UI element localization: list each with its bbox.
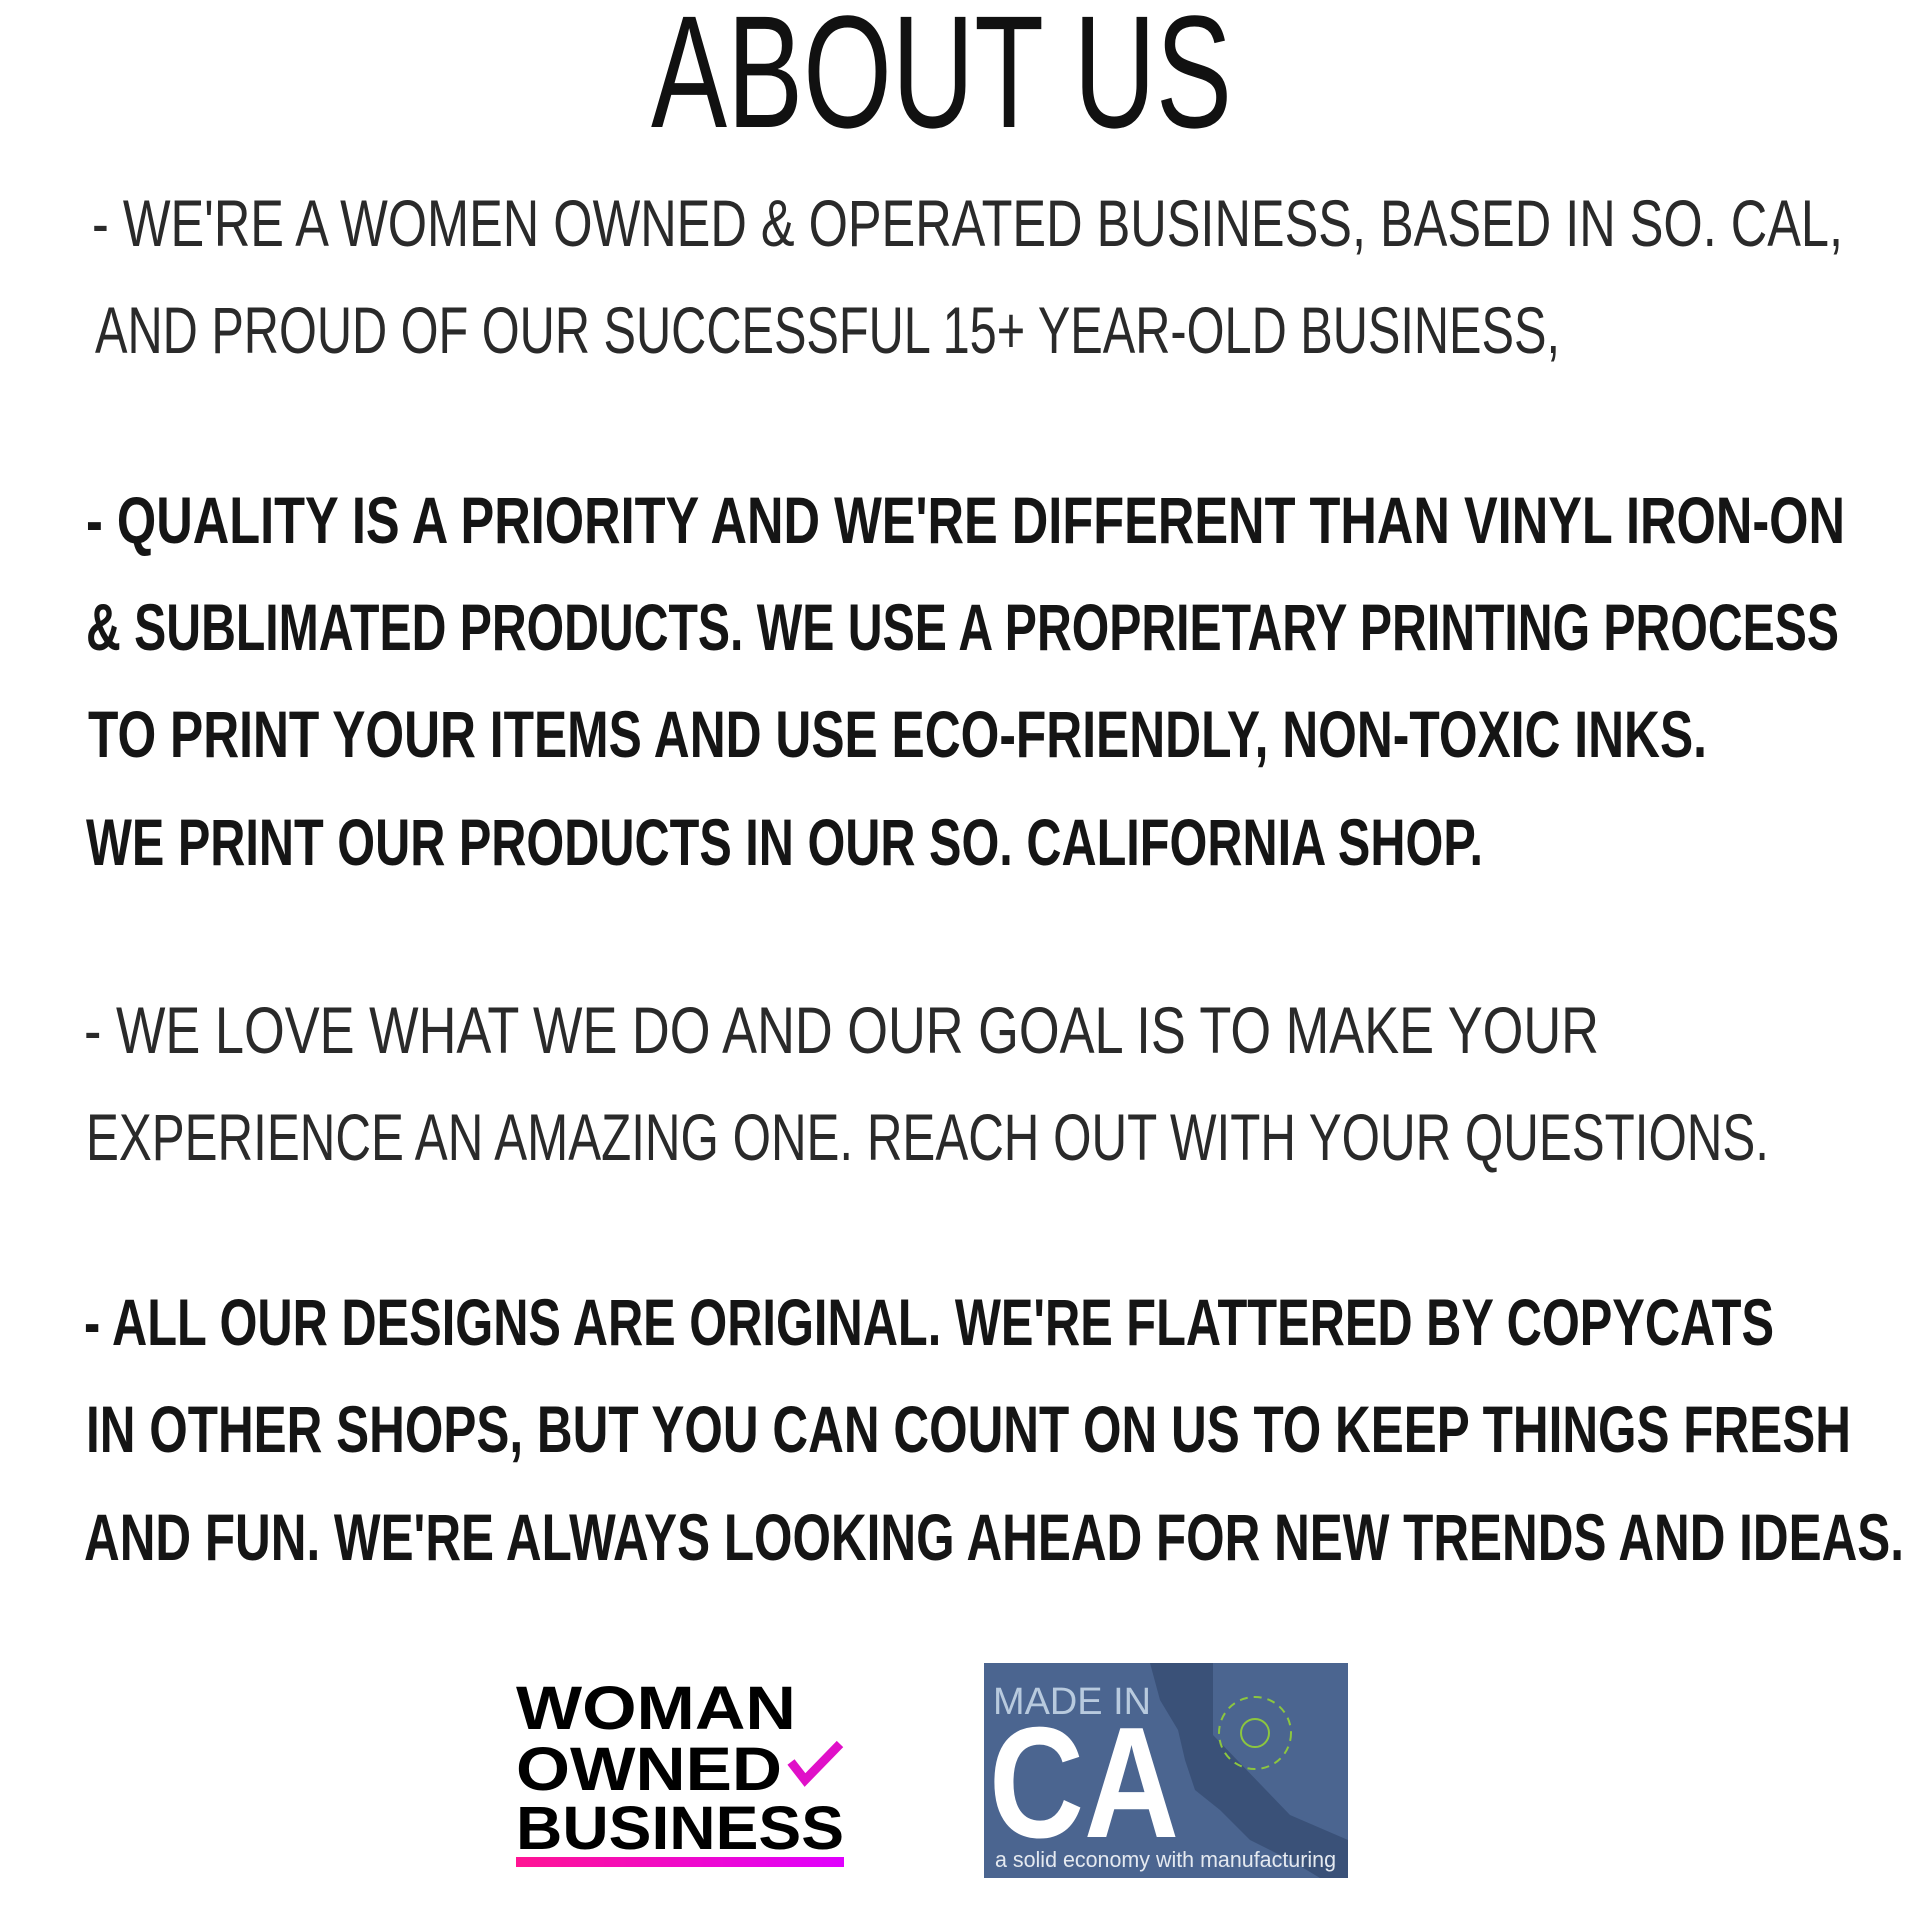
text block: paragraph 2 <box>86 483 1845 879</box>
icon: gear <box>1219 1697 1291 1769</box>
logo: woman owned business <box>516 1674 844 1867</box>
logo: made in CA: CA <box>989 1695 1179 1871</box>
logo: made in CA <box>984 1663 1348 1878</box>
text block: paragraph 4 <box>84 1285 1904 1574</box>
logo: woman owned business: BUSINESS <box>516 1794 844 1862</box>
logo: made in CA: a solid economy with manufacturing <box>995 1847 1336 1872</box>
icon: check mark <box>791 1744 840 1780</box>
logo: made in CA: MADE IN <box>993 1681 1151 1723</box>
text block: paragraph 1 <box>92 186 1843 367</box>
logo: woman owned business: OWNED <box>516 1735 782 1803</box>
logo: woman owned business: WOMAN <box>516 1674 796 1742</box>
icon: california map <box>1150 1663 1348 1878</box>
text block: paragraph 3 <box>84 993 1769 1174</box>
